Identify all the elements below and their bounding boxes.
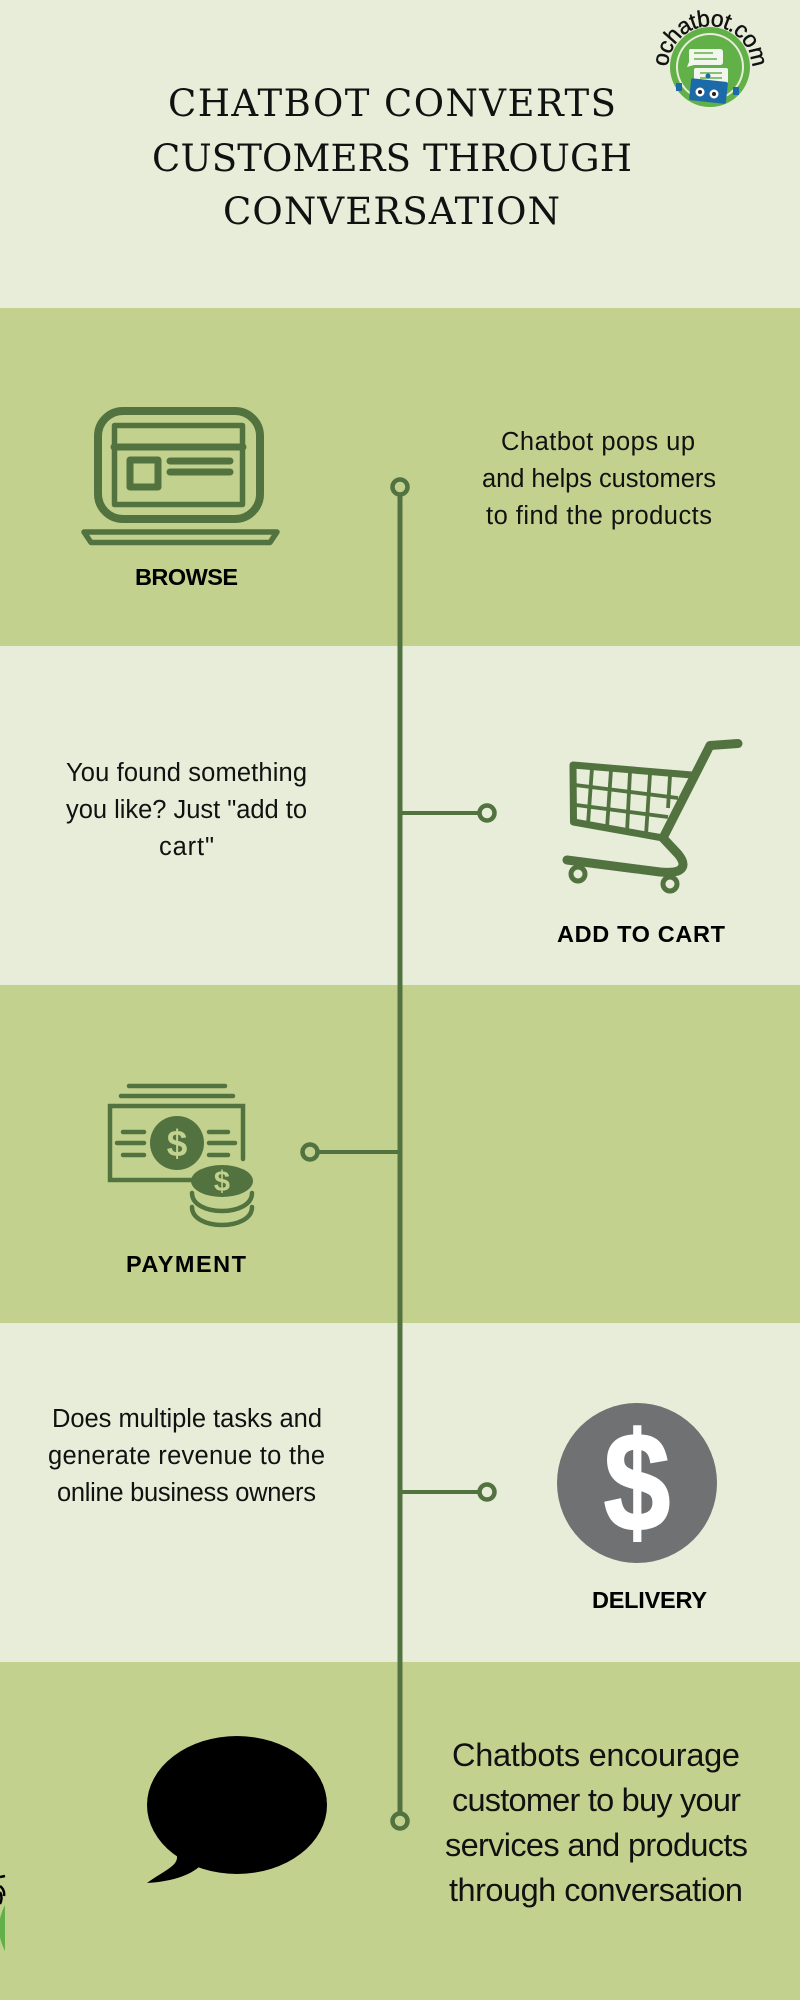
- icon: money and coins: $: [167, 1123, 188, 1164]
- text: conversation description: customer to buy your: [452, 1782, 741, 1818]
- text: browse description: Chatbot pops up: [501, 428, 695, 456]
- title: CONVERSATION: [223, 190, 560, 233]
- text: conversation description: Chatbots encourage: [452, 1737, 740, 1773]
- title: CHATBOT CONVERTS: [168, 82, 616, 125]
- text: conversation description: through conversation: [449, 1872, 743, 1908]
- icon: speech bubble: [147, 1736, 327, 1883]
- logo: ochatbot.com: [656, 10, 764, 107]
- band: delivery: [0, 1323, 800, 1662]
- text: add to cart description: [66, 759, 307, 861]
- icon: laptop: [84, 411, 277, 542]
- text: conversation description: services and products: [445, 1827, 748, 1863]
- logo: ochatbot.com: ochatbot.com: [656, 10, 764, 66]
- text: browse description: [482, 428, 716, 530]
- text: conversation description: [445, 1737, 748, 1908]
- text: add to cart description: You found something: [66, 759, 307, 787]
- icon: dollar circle: [557, 1403, 717, 1563]
- text: browse description: and helps customers: [482, 465, 716, 493]
- text: delivery description: generate revenue to the: [48, 1442, 325, 1470]
- text: add to cart description: cart": [159, 833, 214, 861]
- label: delivery: DELIVERY: [592, 1587, 707, 1613]
- timeline: [302, 480, 494, 1828]
- label: payment: PAYMENT: [126, 1251, 247, 1277]
- label: add to cart: ADD TO CART: [557, 921, 726, 947]
- text: browse description: to find the products: [486, 502, 712, 530]
- band: payment: [0, 985, 800, 1323]
- logo fragment at left edge: [0, 1876, 5, 1951]
- icon: shopping cart: [567, 744, 738, 891]
- text: delivery description: Does multiple tasks and: [52, 1405, 322, 1433]
- band: conversation: [0, 1662, 800, 2000]
- band: browse: [0, 308, 800, 646]
- title: [152, 82, 632, 233]
- icon: dollar circle: $: [604, 1403, 670, 1561]
- band: add to cart: [0, 646, 800, 985]
- icon: money and coins: [110, 1086, 253, 1225]
- text: add to cart description: you like? Just "add to: [66, 796, 307, 824]
- text: delivery description: [48, 1405, 325, 1507]
- label: browse: BROWSE: [135, 564, 238, 590]
- title: CUSTOMERS THROUGH: [152, 137, 632, 180]
- icon: money and coins: $: [214, 1166, 230, 1198]
- text: delivery description: online business owners: [57, 1479, 316, 1507]
- header band: [0, 0, 800, 308]
